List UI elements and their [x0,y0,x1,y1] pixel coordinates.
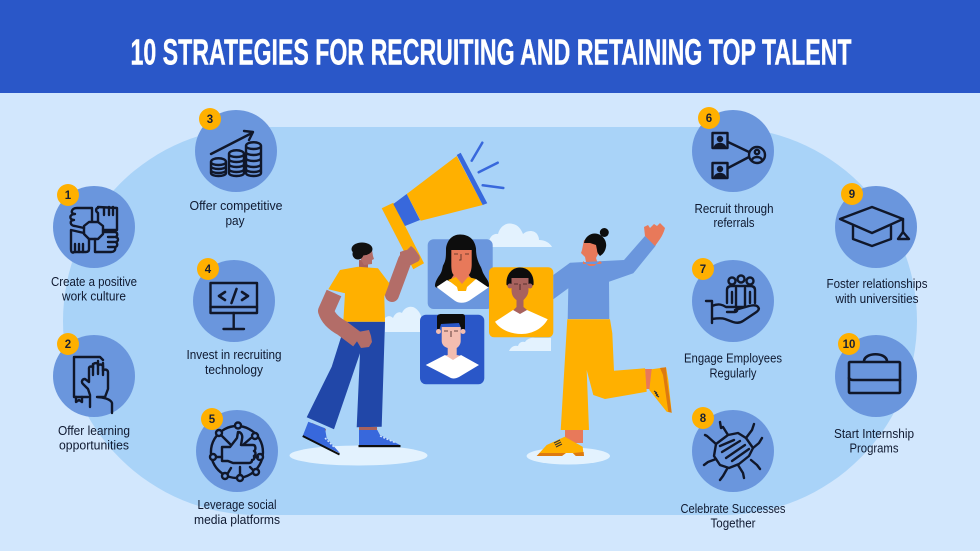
clouds [385,223,552,351]
label: Offer learning [58,424,130,438]
man raised arm [392,260,405,295]
illustration: portrait woman [428,234,493,309]
strategy 5 [194,408,280,527]
strategy 8 [680,407,786,530]
label: Create a positive [51,275,137,289]
label: Programs [850,442,898,456]
icon: graduation cap [840,207,909,246]
icon: monitor with code [210,283,257,329]
number badge: 6 [706,113,712,125]
icon: book and raised hand [74,357,112,413]
ground shadow: man [290,446,428,466]
label: Start Internship [834,427,914,441]
label: Recruit through [694,202,774,216]
number badge: 2 [65,339,71,351]
label: with universities [835,292,918,306]
strategy 1 [51,184,137,304]
label: Together [710,516,756,530]
number badge: 9 [849,189,855,201]
number badge: 4 [205,264,212,276]
strategy 3 [190,108,283,228]
number badge: 3 [207,114,213,126]
illustration: woman waving [527,223,672,464]
man shoes [312,423,326,434]
number badge: 5 [209,414,216,426]
label: referrals [714,216,754,230]
label: Offer competitive [190,199,283,213]
man head [359,260,368,270]
strategy 6 [692,107,774,230]
icon: referral network [712,133,765,178]
icon: briefcase [849,354,900,393]
label: Invest in recruiting [186,348,282,362]
number badge: 10 [843,339,855,351]
icon: rising coins [211,131,261,176]
background pill [63,127,917,515]
label: Regularly [710,366,757,380]
icon: social network thumbs up [210,422,263,481]
number badge: 1 [65,190,72,202]
number badge: 8 [700,413,707,425]
illustration: man with megaphone [290,143,503,465]
title banner [0,0,980,93]
label: technology [205,363,264,377]
illustration: portrait light-skinned man [420,314,484,384]
icon: joined hands [70,207,118,253]
megaphone [382,143,503,269]
woman head [581,238,600,268]
label: work culture [61,290,126,304]
label: Leverage social [198,498,276,512]
label: Foster relationships [826,277,928,291]
strategy 2 [53,333,135,452]
strategy 7 [684,258,782,380]
strategy 9 [826,183,928,306]
label: Engage Employees [684,352,782,366]
label: media platforms [194,513,280,527]
label: opportunities [59,438,129,452]
illustration: portrait dark-skinned man [489,267,553,337]
woman shoes [537,437,584,456]
strategy 4 [186,258,282,377]
icon: team hands [704,422,762,480]
number badge: 7 [700,264,706,276]
icon: people held in hand [706,276,759,323]
ground shadow: woman [527,448,610,464]
label: Celebrate Successes [680,502,786,516]
label: pay [226,214,245,228]
strategy 10 [834,333,917,456]
